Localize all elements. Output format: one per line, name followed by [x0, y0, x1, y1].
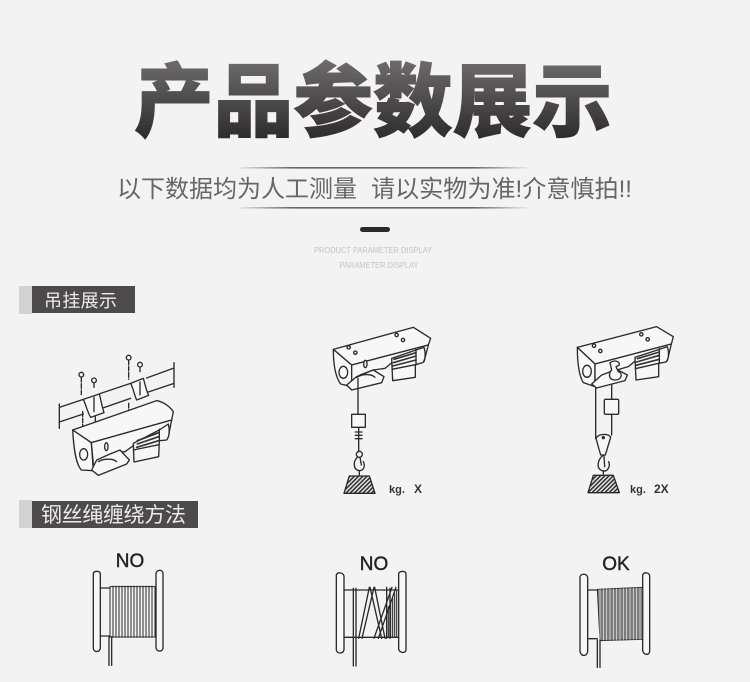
subtitle with rules: 以下数据均为人工测量	[117, 176, 357, 203]
diagram: mounting hoist on beam	[59, 355, 174, 475]
motor ribs and box	[133, 424, 169, 462]
weight label kg 2X: 2X	[654, 482, 669, 496]
spool label NO: NO	[360, 554, 388, 575]
diagram: single rope load X	[333, 327, 431, 493]
weight label kg 2X	[630, 482, 669, 496]
spool: even OK	[580, 573, 650, 667]
diagram: double rope load 2X	[577, 327, 673, 493]
weight label kg X	[389, 482, 422, 496]
hoist	[333, 327, 431, 390]
short dash	[360, 227, 390, 232]
screw heads	[79, 355, 142, 383]
english caption: PRODUCT PARAMETER DISPLAY	[314, 245, 432, 255]
spool: loose NO	[93, 570, 163, 665]
weight	[588, 475, 619, 493]
weight	[344, 476, 375, 493]
english caption: PARAMETER DISPLAY	[340, 260, 419, 270]
hook	[598, 455, 609, 474]
subtitle with rules: 请以实物为准!介意慎拍!!	[371, 176, 632, 203]
rope and block	[356, 378, 361, 452]
spool: crossed NO	[336, 571, 406, 666]
section label: hanging display	[19, 286, 135, 314]
weight label kg 2X: kg.	[630, 484, 646, 496]
hook	[356, 451, 362, 457]
clips	[83, 394, 104, 417]
hook plate	[92, 450, 129, 475]
weight label kg X: X	[414, 482, 422, 496]
ropes and block	[596, 385, 612, 438]
title: 产品参数展示	[134, 38, 612, 154]
hoist body	[73, 401, 173, 443]
spool label OK: OK	[602, 554, 630, 575]
english caption	[314, 245, 432, 270]
hoist	[577, 327, 673, 388]
weight label kg X: kg.	[389, 484, 405, 496]
beam	[59, 363, 174, 428]
subtitle with rules	[117, 167, 632, 209]
section label: wire rope winding: 钢丝绳缠绕方法	[41, 499, 186, 529]
spool label NO: NO	[116, 551, 144, 572]
screws	[81, 360, 143, 433]
section label: hanging display: 吊挂展示	[44, 287, 117, 313]
